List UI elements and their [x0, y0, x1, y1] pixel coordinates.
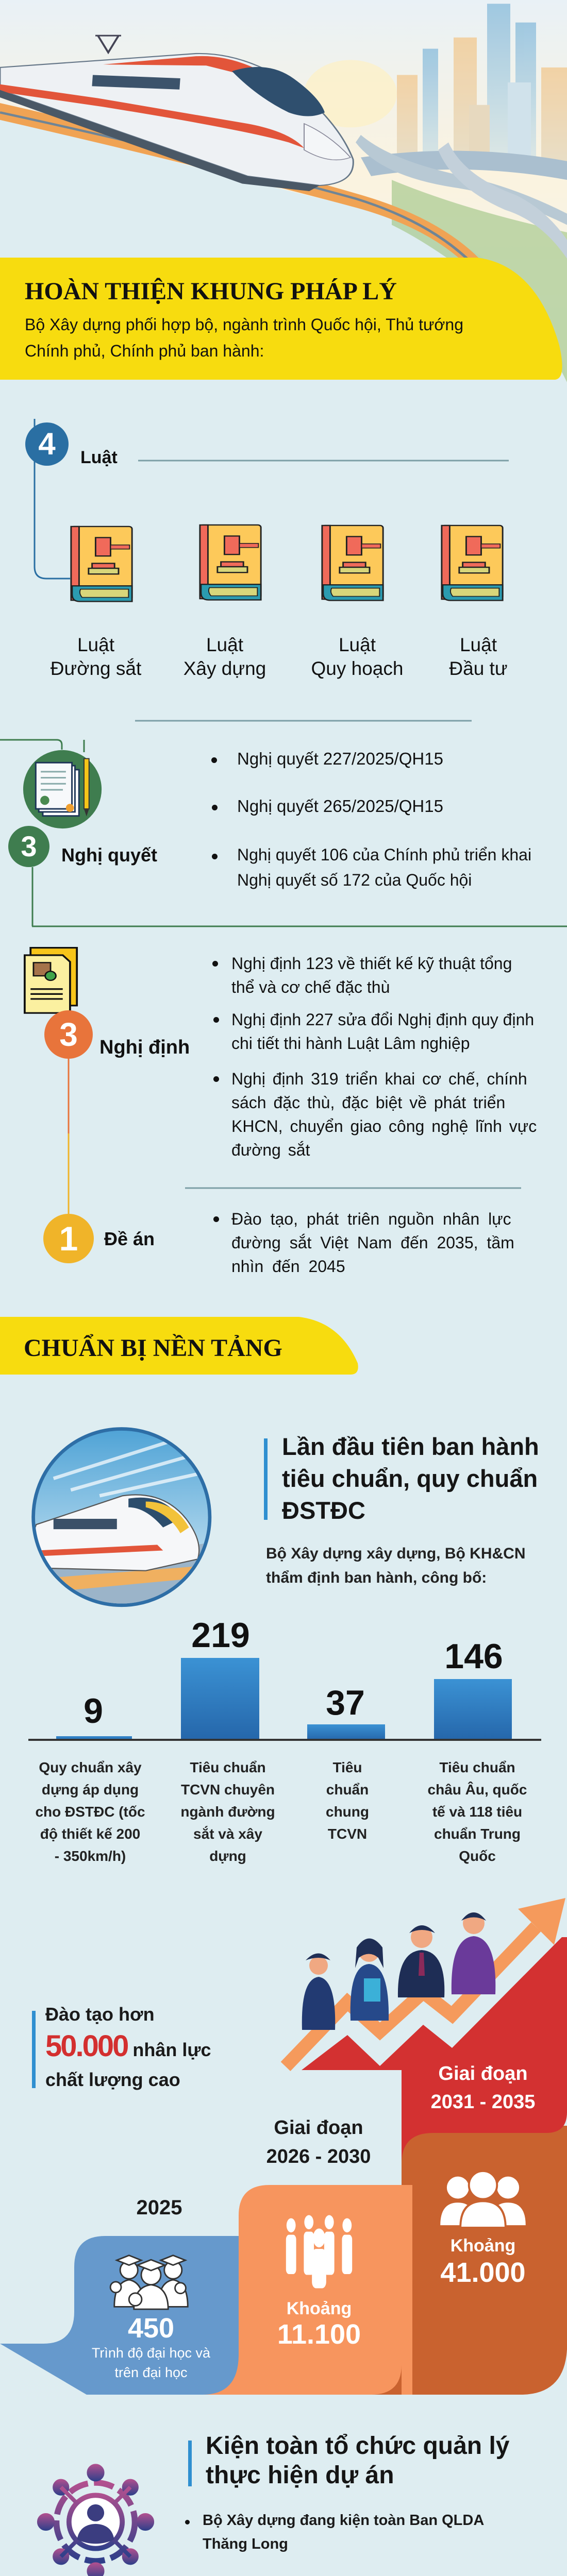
red block with zigzag: [302, 1937, 567, 2164]
heading block: Kiện toàn tổ chức quản lý: [188, 2432, 509, 2489]
badge: 1 Đề án: 1: [59, 1219, 78, 1258]
book: Luật Đầu tư: Đầu tư: [449, 658, 508, 679]
title: HOÀN THIỆN KHUNG PHÁP LÝ: [25, 278, 397, 305]
heading: Nghị quyết: Nghị quyết: [61, 844, 157, 866]
book: Luật Xây dựng: [184, 524, 266, 679]
badge: 3 Nghị quyết: [8, 826, 49, 867]
bar labels: [35, 1759, 527, 1864]
list: Nghị định: chi tiết thi hành Luật Lâm nghiệp: [231, 1034, 470, 1053]
badge: 4 Luật: 4: [38, 427, 56, 461]
icon: crowd: [286, 2215, 353, 2289]
section band: Chuẩn bị nền tảng: [0, 1317, 358, 1375]
list: Nghị định: thể và cơ chế đặc thù: [231, 978, 390, 996]
light orange block: [203, 2185, 412, 2395]
bar labels: chuẩn Trung: [434, 1826, 521, 1842]
badge: 3 Nghị định: 3: [59, 1016, 78, 1053]
bar labels: dựng áp dụng: [42, 1782, 139, 1798]
bar labels: Tiêu chuẩn: [190, 1759, 266, 1775]
stat: 450: trên đại học: [114, 2365, 188, 2380]
stat: 11.100: 11.100: [277, 2319, 361, 2350]
list: Nghị quyết: Nghị quyết 227/2025/QH15: [237, 749, 443, 768]
heading: Nghị định: Nghị định: [99, 1037, 190, 1058]
book: Luật Quy hoạch: Quy hoạch: [311, 658, 403, 679]
text: training 50.000 workers: [32, 2004, 211, 2090]
text: ministry standards: thẩm định ban hành, công bố:: [266, 1569, 487, 1586]
badge: 1 Đề án: [43, 1214, 94, 1263]
dark orange block: [402, 2126, 567, 2395]
icon: group of people: [440, 2172, 526, 2227]
list: management actions: Bộ Xây dựng đang kiện toàn Ban QLDA: [203, 2512, 484, 2529]
stat: 41.000: [440, 2172, 526, 2288]
text: ministry standards: Bộ Xây dựng xây dựng, Bộ KH&CN: [266, 1545, 525, 1562]
list: Nghị định: đường sắt: [231, 1141, 310, 1159]
book: Luật Đường sắt: Luật: [77, 634, 114, 655]
list: Nghị định: sách đặc thù, đặc biệt về phát triển: [231, 1093, 505, 1112]
label: Giai đoạn 2031-2035: Giai đoạn: [438, 2063, 528, 2084]
list: Đề án: đường sắt Việt Nam đến 2035, tầm: [231, 1233, 514, 1252]
bar labels: tế và 118 tiêu: [432, 1804, 522, 1820]
text: training 50.000 workers: 50.000 nhân lực: [45, 2029, 211, 2063]
list: Nghị quyết: Nghị quyết 106 của Chính phủ triển khai: [237, 845, 531, 864]
stat: 450: Trình độ đại học và: [92, 2345, 210, 2361]
text: training 50.000 workers: chất lượng cao: [45, 2069, 180, 2090]
label: Giai đoạn 2026-2030: [266, 2117, 371, 2167]
book: Luật Đường sắt: [51, 526, 141, 679]
heading block: Lần đầu tiên ban hành tiêu chuẩn: ĐSTĐC: [282, 1497, 365, 1524]
stat: 450: 450: [128, 2313, 174, 2344]
blue block: [0, 2236, 239, 2395]
text: training 50.000 workers: Đào tạo hơn: [45, 2004, 155, 2025]
list: Đề án: Đào tạo, phát triên nguồn nhân lực: [231, 1210, 511, 1228]
heading block: Lần đầu tiên ban hành tiêu chuẩn: tiêu chuẩn, quy chuẩn: [282, 1465, 538, 1492]
bar labels: Quốc: [459, 1848, 496, 1864]
label: Giai đoạn 2026-2030: Giai đoạn: [274, 2117, 363, 2139]
book: Luật Quy hoạch: [311, 524, 403, 679]
bar chart: standards counts: 9: [84, 1691, 103, 1731]
stat: 11.100: Khoảng: [287, 2299, 352, 2318]
bar labels: chung: [326, 1804, 369, 1820]
section band: Hoàn thiện khung pháp lý: [0, 258, 562, 380]
list: Đề án: [213, 1210, 514, 1276]
heading block: Lần đầu tiên ban hành tiêu chuẩn: Lần đầu tiên ban hành: [282, 1433, 539, 1460]
bar labels: châu Âu, quốc: [428, 1782, 527, 1798]
stat: 41.000: Khoảng: [451, 2236, 515, 2256]
list: management actions: [185, 2512, 484, 2552]
bar labels: ngành đường: [180, 1804, 275, 1820]
list: Nghị định: Nghị định 319 triển khai cơ chế, chính: [231, 1070, 527, 1088]
heading block: Kiện toàn tổ chức quản lý: Kiện toàn tổ chức quản lý: [206, 2432, 509, 2460]
book: Luật Xây dựng: Luật: [206, 634, 243, 655]
heading: Luật: Luật: [80, 448, 118, 467]
stat: 41.000: 41.000: [440, 2257, 526, 2288]
bar chart: standards counts: 37: [326, 1683, 365, 1722]
heading: Đề án: Đề án: [104, 1228, 155, 1249]
icon: train in circle: [31, 1427, 211, 1607]
bar labels: - 350km/h): [55, 1848, 126, 1864]
book: Luật Đường sắt: Đường sắt: [51, 658, 141, 679]
icon: resolution documents in green circle: [23, 750, 102, 828]
list: Nghị định: Nghị định 123 về thiết kế kỹ thuật tổng: [231, 954, 512, 973]
book: Luật Xây dựng: Xây dựng: [184, 658, 266, 679]
bar labels: dựng: [209, 1848, 246, 1864]
list: Nghị quyết: [211, 749, 531, 889]
bar labels: độ thiết kế 200: [40, 1826, 140, 1842]
hero illustration: high-speed train and city: [0, 0, 567, 382]
icon: management network: [37, 2464, 155, 2576]
timeline connector lines: [0, 419, 567, 1214]
orange arrow: [286, 1927, 536, 2066]
intro text: Bộ Xây dựng phối hợp bộ, ngành trình Quốc hội, Thủ tướng: [25, 315, 463, 334]
bar labels: TCVN chuyên: [181, 1782, 275, 1798]
list: Đề án: nhìn đến 2045: [231, 1257, 345, 1276]
icon: graduates: [109, 2255, 189, 2310]
list: management actions: Thăng Long: [203, 2536, 288, 2552]
book: Luật Đầu tư: [441, 524, 508, 679]
badge: 4 Luật: [25, 422, 69, 466]
bar labels: TCVN: [328, 1826, 367, 1842]
icon: decree document: [24, 947, 78, 1014]
label: Giai đoạn 2031-2035: [431, 2063, 535, 2113]
intro text: Chính phủ, Chính phủ ban hành:: [25, 342, 264, 360]
heading block: Kiện toàn tổ chức quản lý: thực hiện dự án: [206, 2462, 394, 2489]
stat: 450: [92, 2255, 210, 2380]
bar labels: sắt và xây: [193, 1826, 262, 1842]
bar labels: cho ĐSTĐC (tốc: [35, 1804, 145, 1820]
people figures: [302, 1912, 495, 2030]
list: Nghị định: KHCN, chuyển giao công nghệ lĩnh vực: [231, 1117, 537, 1136]
list: Nghị định: Nghị định 227 sửa đổi Nghị định quy định: [231, 1010, 534, 1029]
book: Luật Quy hoạch: Luật: [339, 634, 376, 655]
bar labels: Quy chuẩn xây: [39, 1759, 142, 1775]
label: Giai đoạn 2026-2030: 2026 - 2030: [266, 2146, 371, 2167]
intro text: [25, 315, 463, 360]
list: Nghị quyết: Nghị quyết số 172 của Quốc hội: [237, 871, 472, 889]
bar chart: standards counts: 219: [191, 1616, 250, 1655]
list: Nghị định: [212, 954, 537, 1159]
badge: 3 Nghị quyết: 3: [21, 830, 37, 862]
badge: 3 Nghị định: [44, 1010, 93, 1059]
chart: workforce growth steps: [0, 1898, 567, 2395]
label: 2025: 2025: [136, 2196, 182, 2219]
bar labels: Tiêu chuẩn: [439, 1759, 515, 1775]
stat: 11.100: [277, 2215, 361, 2350]
list: Nghị quyết: Nghị quyết 265/2025/QH15: [237, 796, 443, 816]
bar chart: standards counts: 146: [444, 1637, 503, 1676]
bar labels: chuẩn: [326, 1782, 369, 1798]
bar labels: Tiêu: [332, 1759, 362, 1775]
law books row: [51, 524, 508, 679]
bar chart: standards counts: [28, 1616, 541, 1741]
book: Luật Đầu tư: Luật: [460, 634, 497, 655]
label: Giai đoạn 2031-2035: 2031 - 2035: [431, 2091, 535, 2113]
section band: Chuẩn bị nền tảng: CHUẨN BỊ NỀN TẢNG: [24, 1334, 282, 1362]
text: ministry standards: [266, 1545, 525, 1586]
heading block: Lần đầu tiên ban hành tiêu chuẩn: [264, 1433, 539, 1524]
